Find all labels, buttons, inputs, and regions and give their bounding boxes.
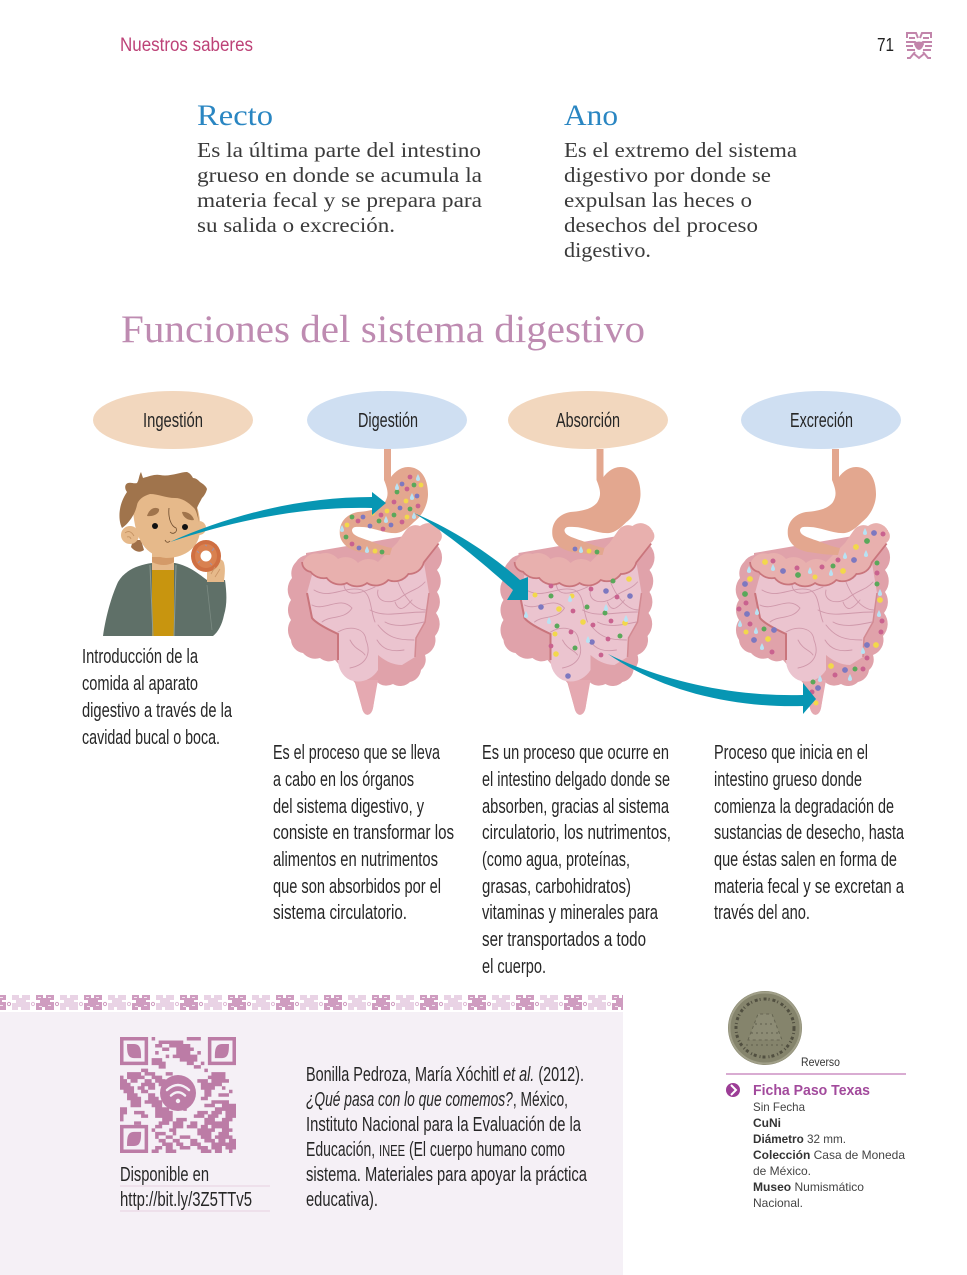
text block: absorption description: el intestino delgado donde se bbox=[482, 769, 670, 791]
icon: emblem bbox=[906, 33, 932, 58]
page number: 71 bbox=[877, 35, 894, 55]
illustration: digestive system, digestion stage bbox=[288, 449, 442, 715]
text block: absorption description: ser transportados a todo bbox=[482, 929, 646, 951]
text block: digestion description: consiste en transformar los bbox=[273, 822, 454, 844]
label: Excreción: Excreción bbox=[790, 410, 853, 432]
label: Digestión bbox=[307, 391, 467, 449]
QR caption: link: http://bit.ly/3Z5TTv5 bbox=[120, 1189, 252, 1211]
text block: digestion description: sistema circulatorio. bbox=[273, 902, 407, 924]
text block: digestion description: a cabo en los órganos bbox=[273, 769, 414, 791]
text block: coin details: Nacional. bbox=[753, 1196, 803, 1210]
coin data sheet bbox=[753, 1082, 905, 1210]
text block: Recto description: Es la última parte del intestino bbox=[197, 138, 481, 162]
illustration: digestive system, absorption stage bbox=[500, 449, 655, 715]
text block: absorption description: vitaminas y minerales para bbox=[482, 902, 659, 924]
text block: Ano description: digestivo. bbox=[564, 238, 651, 262]
coin image: reverse bbox=[728, 991, 802, 1065]
text block: excretion description: Proceso que inicia en el bbox=[714, 742, 868, 764]
title: Funciones del sistema digestivo bbox=[121, 308, 645, 351]
text block: absorption description bbox=[482, 742, 671, 978]
illustration: digestive system, excretion stage bbox=[736, 449, 890, 715]
text block: coin details bbox=[753, 1100, 905, 1210]
arrow: mouth to stomach bbox=[170, 492, 386, 542]
text block: absorption description: Es un proceso que ocurre en bbox=[482, 742, 669, 764]
text block: coin details: CuNi bbox=[753, 1116, 781, 1130]
heading: Ano: Ano bbox=[564, 99, 618, 132]
text block: Ano description: digestivo por donde se bbox=[564, 163, 771, 187]
text block: ingestion description bbox=[82, 646, 233, 749]
heading: Recto: Recto bbox=[197, 99, 273, 132]
text block: coin details: Sin Fecha bbox=[753, 1100, 805, 1114]
label: Ingestión: Ingestión bbox=[143, 410, 203, 432]
text block: coin details: Diámetro 32 mm. bbox=[753, 1132, 846, 1146]
label: Excreción bbox=[741, 391, 901, 449]
label: Absorción bbox=[508, 391, 668, 449]
text block: ingestion description: digestivo a través de la bbox=[82, 700, 233, 722]
text block: absorption description: grasas, carbohidratos) bbox=[482, 876, 631, 898]
text block: bibliographic reference: Instituto Nacional para la Evaluación de la bbox=[306, 1114, 582, 1136]
illustration: boy eating a donut bbox=[103, 472, 226, 636]
text block: Ano description: expulsan las heces o bbox=[564, 188, 752, 212]
text block: absorption description: el cuerpo. bbox=[482, 956, 546, 978]
text block: excretion description: intestino grueso donde bbox=[714, 769, 862, 791]
text block: digestion description bbox=[273, 742, 454, 924]
text block: Recto description: materia fecal y se prepara para bbox=[197, 188, 482, 212]
panel: Recto bbox=[197, 99, 482, 237]
text block: Recto description: grueso en donde se acumula la bbox=[197, 163, 482, 187]
nutrient particles in stomach bbox=[340, 474, 423, 554]
text block: bibliographic reference: Bonilla Pedroza, María Xóchitl et al. (2012). bbox=[306, 1064, 584, 1086]
text block: coin details: Museo Numismático bbox=[753, 1180, 864, 1194]
text block: absorption description: absorben, gracias al sistema bbox=[482, 796, 670, 818]
coin divider bbox=[726, 1073, 906, 1075]
text block: excretion description: comienza la degradación de bbox=[714, 796, 894, 818]
QR caption: link bbox=[120, 1164, 270, 1211]
text block: ingestion description: comida al aparato bbox=[82, 673, 198, 695]
text block: Recto description: su salida o excreción. bbox=[197, 213, 395, 237]
text block: absorption description: circulatorio, los nutrimentos, bbox=[482, 822, 671, 844]
panel: reference background bbox=[0, 1012, 623, 1275]
heading: coin name: Ficha Paso Texas bbox=[753, 1082, 870, 1099]
text block: digestion description: alimentos en nutrimentos bbox=[273, 849, 438, 871]
header: section name: Nuestros saberes bbox=[120, 35, 253, 56]
text block: Recto description bbox=[197, 138, 482, 237]
arrow: stomach to small intestine bbox=[414, 513, 528, 600]
text block: bibliographic reference: educativa). bbox=[306, 1189, 378, 1211]
text block: bibliographic reference bbox=[306, 1064, 588, 1211]
text block: absorption description: (como agua, proteínas, bbox=[482, 849, 630, 871]
text block: digestion description: Es el proceso que se lleva bbox=[273, 742, 441, 764]
label: Ingestión bbox=[93, 391, 253, 449]
nutrient particles in large intestine bbox=[736, 528, 886, 706]
text block: bibliographic reference: Educación, INEE (El cuerpo humano como bbox=[306, 1139, 565, 1161]
text block: digestion description: que son absorbidos por el bbox=[273, 876, 441, 898]
QR caption: link: Disponible en bbox=[120, 1164, 209, 1186]
nutrient particles in small intestine bbox=[524, 546, 633, 679]
text block: Ano description: desechos del proceso bbox=[564, 213, 758, 237]
text block: excretion description: que éstas salen en forma de bbox=[714, 849, 897, 871]
coin caption: Reverso bbox=[801, 1057, 840, 1069]
text block: excretion description bbox=[714, 742, 905, 924]
text block: bibliographic reference: sistema. Materiales para apoyar la práctica bbox=[306, 1164, 588, 1186]
text block: Ano description: Es el extremo del sistema bbox=[564, 138, 797, 162]
text block: excretion description: través del ano. bbox=[714, 902, 810, 924]
icon: chevron bullet bbox=[726, 1083, 740, 1097]
text block: excretion description: materia fecal y se excretan a bbox=[714, 876, 905, 898]
arrow: small intestine to rectum bbox=[608, 654, 816, 714]
label: Digestión: Digestión bbox=[358, 410, 418, 432]
text block: coin details: de México. bbox=[753, 1164, 811, 1178]
decorative pattern band bbox=[0, 995, 623, 1011]
text block: coin details: Colección Casa de Moneda bbox=[753, 1148, 905, 1162]
label: Absorción: Absorción bbox=[556, 410, 620, 432]
text block: ingestion description: Introducción de la bbox=[82, 646, 199, 668]
QR code bbox=[120, 1039, 236, 1151]
panel: Ano bbox=[564, 99, 797, 262]
text block: bibliographic reference: ¿Qué pasa con lo que comemos?, México, bbox=[306, 1089, 568, 1111]
text block: ingestion description: cavidad bucal o boca. bbox=[82, 727, 220, 749]
text block: Ano description bbox=[564, 138, 797, 262]
text block: digestion description: del sistema digestivo, y bbox=[273, 796, 424, 818]
